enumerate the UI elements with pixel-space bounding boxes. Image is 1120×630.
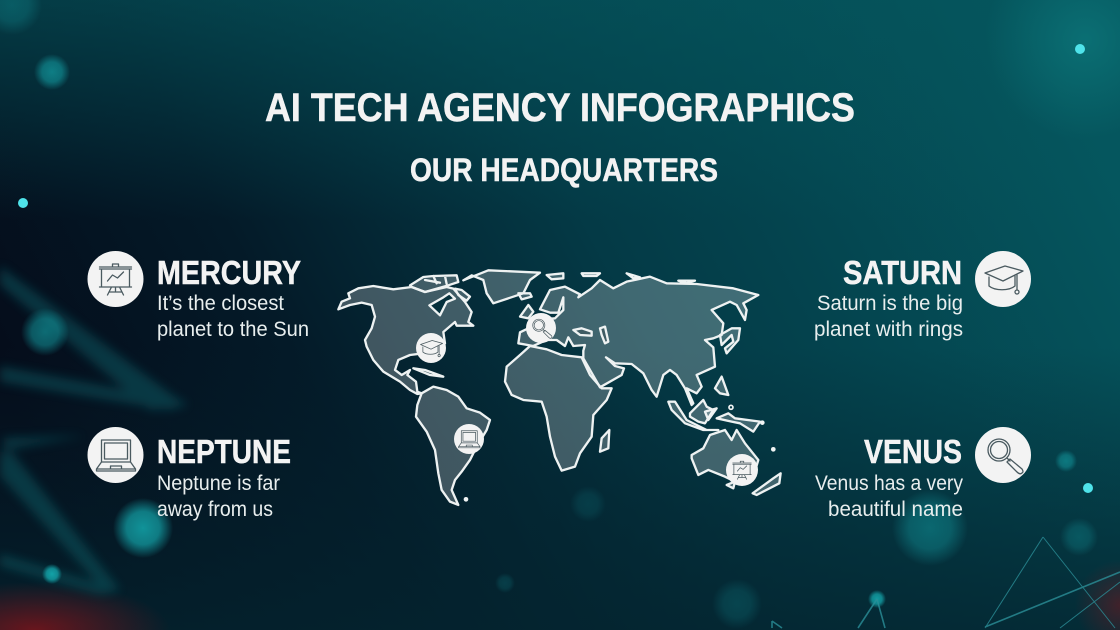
- text: mercury description: It’s the closest: [157, 292, 284, 315]
- text: venus description: [815, 472, 963, 521]
- text: neptune description: away from us: [157, 498, 273, 521]
- text: saturn description: [814, 292, 963, 341]
- panel: neptune: [88, 427, 291, 521]
- map pin: presentation chart: [726, 454, 758, 486]
- text: venus description: beautiful name: [828, 498, 963, 521]
- map pin: graduation cap: [416, 333, 446, 363]
- subtitle: OUR HEADQUARTERS: [410, 152, 718, 188]
- text: mercury description: [157, 292, 309, 341]
- icon: laptop: [88, 427, 144, 483]
- heading: saturn: SATURN: [843, 254, 962, 291]
- map pin: magnifier: [526, 313, 556, 343]
- text: venus description: Venus has a very: [815, 472, 963, 495]
- text: mercury description: planet to the Sun: [157, 318, 309, 341]
- panel: saturn: [814, 251, 1031, 341]
- panel: venus: [815, 427, 1031, 521]
- heading: neptune: NEPTUNE: [157, 433, 291, 470]
- icon: graduation cap: [975, 251, 1031, 307]
- world map: [338, 270, 781, 505]
- americas and greenland: [338, 270, 540, 505]
- panel: mercury: [88, 251, 309, 341]
- icon: magnifier: [975, 427, 1031, 483]
- text: neptune description: [157, 472, 280, 521]
- text: saturn description: planet with rings: [814, 318, 963, 341]
- heading: venus: VENUS: [864, 433, 962, 470]
- heading: mercury: MERCURY: [157, 254, 301, 291]
- africa, eurasia and australia: [505, 273, 781, 495]
- icon: presentation chart: [88, 251, 144, 307]
- title: AI TECH AGENCY INFOGRAPHICS: [265, 86, 855, 130]
- text: neptune description: Neptune is far: [157, 472, 280, 495]
- map pin: laptop: [454, 424, 484, 454]
- text: saturn description: Saturn is the big: [817, 292, 963, 315]
